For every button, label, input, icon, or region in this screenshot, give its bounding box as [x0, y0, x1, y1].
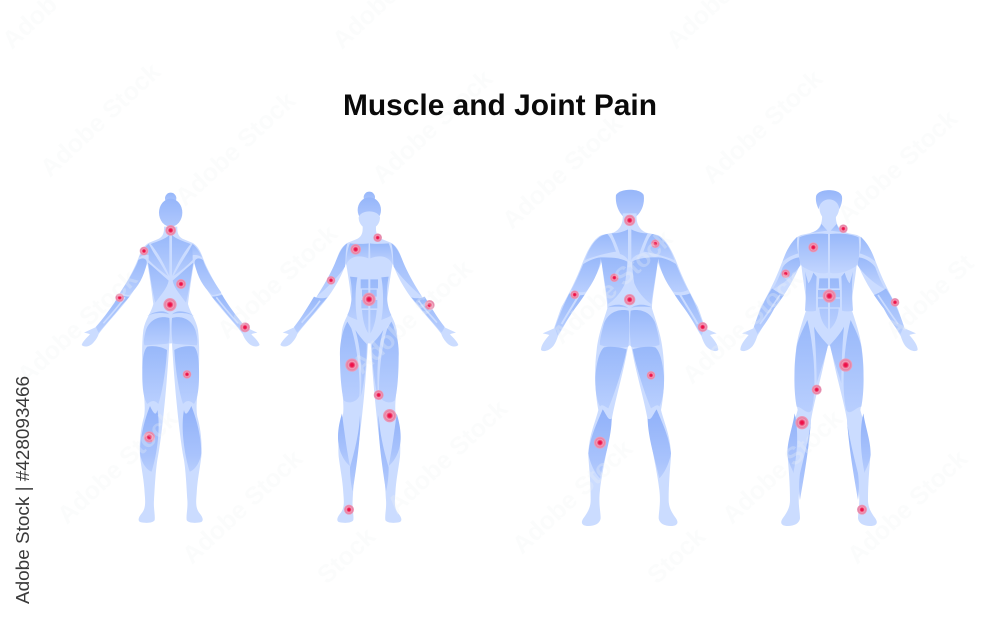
watermark pattern: Adobe Stock	[347, 255, 478, 379]
body and muscles	[280, 227, 458, 523]
body and muscles	[82, 227, 260, 523]
watermark pattern: Adobe Stock	[832, 105, 963, 229]
watermark pattern: Adobe Stock	[717, 405, 848, 529]
body and muscles	[541, 213, 718, 526]
title: Muscle and Joint Pain	[343, 89, 657, 122]
figure: male back view	[541, 190, 718, 526]
head, hair and face	[358, 192, 381, 229]
watermark pattern: Adobe Stock	[547, 225, 678, 349]
body and muscles	[740, 213, 918, 526]
pain points	[570, 215, 708, 449]
watermark pattern: Adobe Stock	[170, 87, 301, 211]
figure: female back view	[82, 193, 260, 523]
watermark pattern: Adobe Stock	[52, 405, 183, 529]
watermark pattern: Adobe Stock	[212, 220, 343, 344]
watermark pattern: Stock	[312, 522, 381, 589]
watermark pattern: Adobe Stock	[842, 445, 973, 569]
watermark pattern: Adobe Stock	[177, 445, 308, 569]
pain points	[327, 233, 435, 515]
watermark pattern: Adobe Stock	[507, 435, 638, 559]
watermark pattern: Adobe Stock	[497, 110, 628, 234]
watermark pattern: Adobe St	[880, 249, 980, 344]
stock ID label: Adobe Stock | #428093466	[13, 376, 33, 604]
watermark pattern: Adobe Stock	[12, 265, 143, 389]
figure: female front view	[280, 192, 458, 523]
pain points	[781, 224, 899, 515]
figure: male front view	[740, 190, 918, 526]
head and hair bun	[159, 193, 182, 227]
watermark pattern: Adobe Stock	[677, 265, 808, 389]
watermark pattern: Stock	[642, 522, 711, 589]
watermark pattern: Adobe Stock	[382, 395, 513, 519]
watermark pattern: Adobe Stock	[697, 65, 828, 189]
watermark pattern: Adobe Stock	[35, 58, 166, 182]
pain points	[115, 225, 250, 443]
watermark pattern: Adobe Stock	[367, 65, 498, 189]
head	[616, 190, 644, 216]
head, hair and face	[816, 190, 842, 221]
